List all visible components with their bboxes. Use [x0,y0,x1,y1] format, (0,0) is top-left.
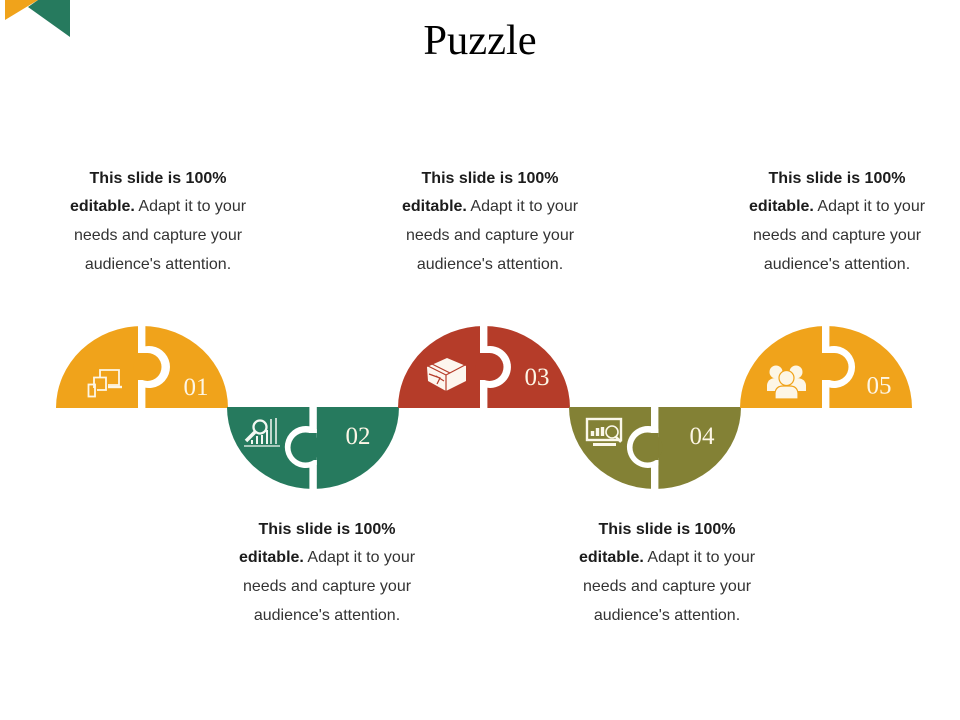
puzzle piece 02 [227,405,399,491]
puzzle piece 04 [569,405,741,491]
number 05: 05 [866,372,892,400]
text block: step 5: audience's attention. [764,256,910,273]
icon: devices [88,370,122,396]
puzzle piece 03 [398,320,570,410]
icon: box [427,358,466,391]
title: Puzzle [423,17,537,64]
puzzle piece 05 [740,320,912,410]
text block: step 1 [70,170,246,273]
text block: step 1: editable. Adapt it to your [70,198,246,215]
text block: step 4 [579,521,755,624]
text block: step 2: This slide is 100% [259,521,395,538]
icon: people [767,366,806,399]
text block: step 3: editable. Adapt it to your [402,198,578,215]
text block: step 1: audience's attention. [85,256,231,273]
text block: step 4: needs and capture your [583,578,751,595]
text block: step 2: needs and capture your [243,578,411,595]
text block: step 3: This slide is 100% [422,170,558,187]
text block: step 2 [239,521,415,624]
text block: step 5 [749,170,925,273]
text block: step 5: editable. Adapt it to your [749,198,925,215]
puzzle piece 01 [56,320,228,410]
icon: magnifier with bars [244,418,280,446]
corner ribbon [5,0,70,37]
text block: step 4: This slide is 100% [599,521,735,538]
text block: step 5: needs and capture your [753,227,921,244]
text block: step 3: audience's attention. [417,256,563,273]
text block: step 4: audience's attention. [594,607,740,624]
text block: step 3 [402,170,578,273]
number 02: 02 [346,423,370,450]
text block: step 2: audience's attention. [254,607,400,624]
text block: step 4: editable. Adapt it to your [579,549,755,566]
number 01: 01 [184,374,208,401]
text block: step 3: needs and capture your [406,227,574,244]
text block: step 1: This slide is 100% [90,170,226,187]
text block: step 5: This slide is 100% [769,170,905,187]
text block: step 2: editable. Adapt it to your [239,549,415,566]
text block: step 1: needs and capture your [74,227,242,244]
number 03: 03 [524,364,550,391]
icon: monitor with chart [587,419,621,446]
number 04: 04 [690,423,715,450]
